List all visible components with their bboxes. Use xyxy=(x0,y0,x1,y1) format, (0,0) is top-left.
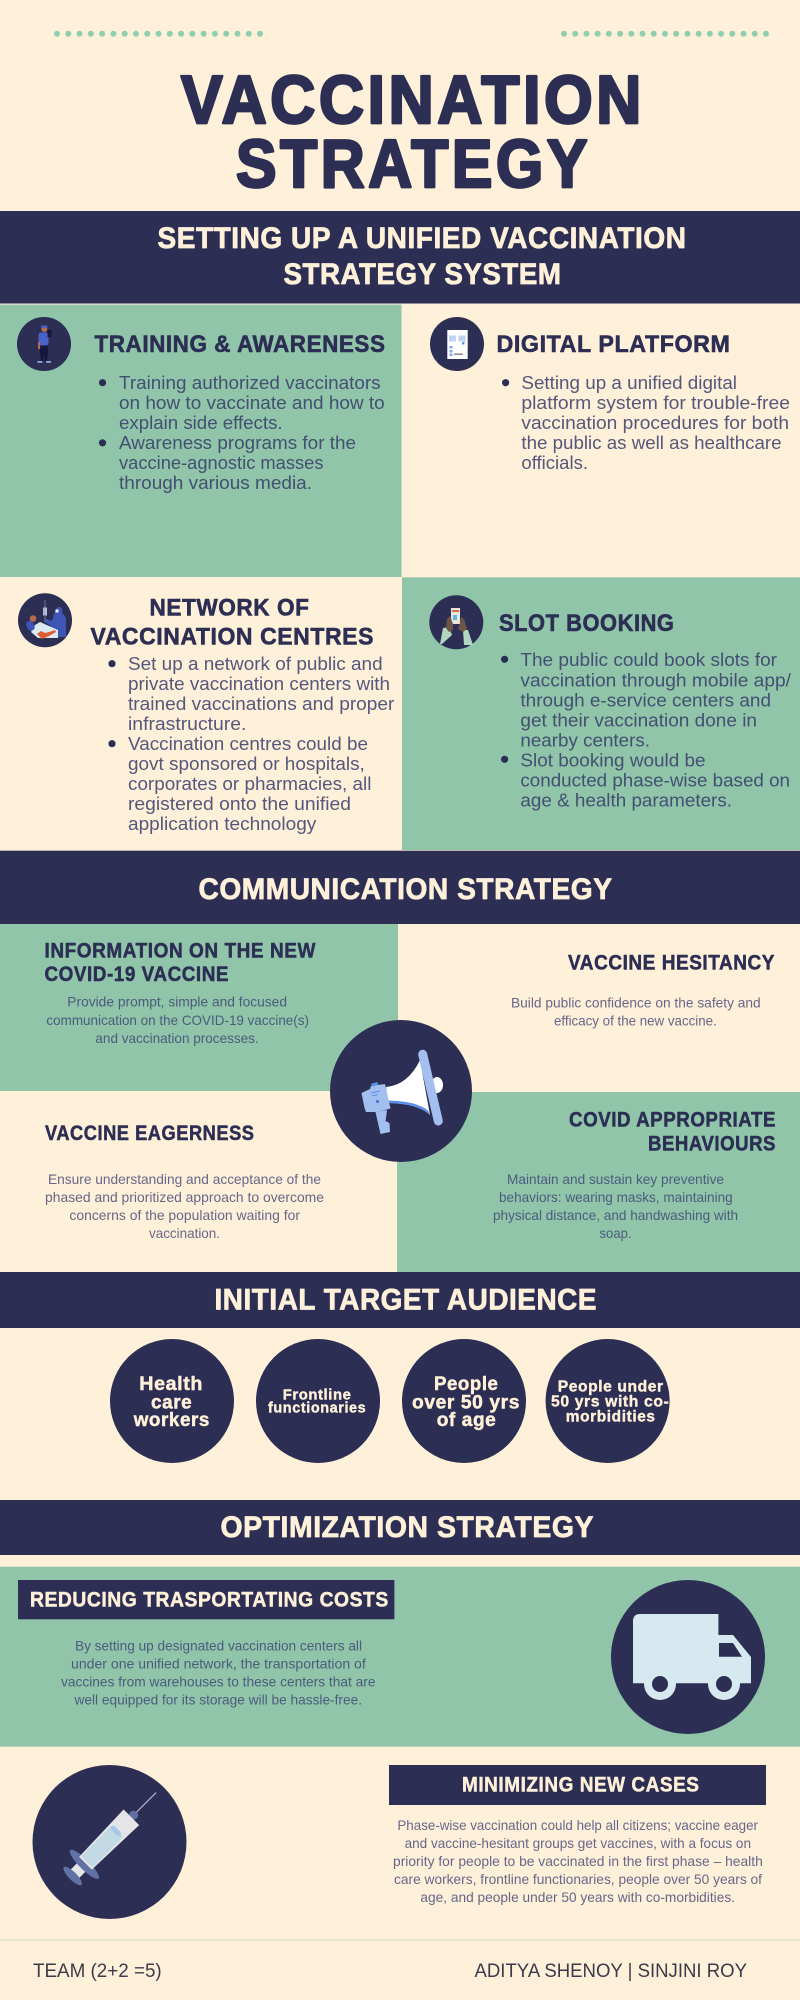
heading: VACCINE EAGERNESS xyxy=(45,1122,254,1145)
heading: DIGITAL PLATFORM xyxy=(496,331,730,358)
icon: person with phone xyxy=(17,317,71,371)
body text xyxy=(46,994,309,1046)
bullet list: trained vaccinations and proper xyxy=(128,693,394,714)
heading: COVID-19 VACCINE xyxy=(44,963,229,986)
bullet list: Training authorized vaccinators xyxy=(119,372,381,393)
bullet list: corporates or pharmacies, all xyxy=(128,773,371,794)
footer: authors: ADITYA SHENOY | SINJINI ROY xyxy=(474,1961,747,1982)
section header: communication strategy xyxy=(0,851,800,924)
body text: Maintain and sustain key preventive xyxy=(507,1171,724,1187)
bullet list: govt sponsored or hospitals, xyxy=(128,753,365,774)
title: STRATEGY xyxy=(236,126,591,202)
label heading xyxy=(18,1580,394,1619)
panel: network of vaccination centres xyxy=(0,577,402,850)
bullet list: on how to vaccinate and how to xyxy=(119,392,385,413)
body text: physical distance, and handwashing with xyxy=(493,1207,738,1223)
body text: age, and people under 50 years with co-morbidities. xyxy=(420,1889,735,1905)
bullet list xyxy=(108,653,394,834)
audience circle: people under 50 years with co-morbidities: morbidities xyxy=(566,1409,656,1426)
audience circle: people over 50 years of age: of age xyxy=(437,1409,496,1431)
bullet list: through various media. xyxy=(119,472,312,493)
section heading text xyxy=(158,222,686,291)
heading: INFORMATION ON THE NEW xyxy=(44,939,316,962)
section header: initial target audience xyxy=(0,1272,800,1328)
audience circle: people under 50 years with co-morbidities: 50 yrs with co- xyxy=(551,1394,669,1411)
section heading text: OPTIMIZATION STRATEGY xyxy=(220,1511,594,1544)
body text: concerns of the population waiting for xyxy=(69,1207,300,1223)
bullet list: age & health parameters. xyxy=(520,790,732,810)
bullet list: The public could book slots for xyxy=(520,649,777,670)
section header: unified vaccination strategy system xyxy=(0,211,800,304)
body text: Build public confidence on the safety and xyxy=(511,995,761,1011)
body text xyxy=(61,1638,376,1708)
dotted decoration: right xyxy=(564,31,768,37)
bullet list: explain side effects. xyxy=(119,412,283,433)
panel: vaccine eagerness xyxy=(0,1091,397,1272)
audience circle: people over 50 years of age: People xyxy=(434,1373,498,1395)
body text: vaccination. xyxy=(149,1225,220,1241)
heading: SLOT BOOKING xyxy=(499,610,674,637)
bullet list: the public as well as healthcare xyxy=(521,432,782,453)
bullet list: platform system for trouble-free xyxy=(521,392,790,413)
title: VACCINATION xyxy=(181,62,645,138)
heading: NETWORK OF xyxy=(150,595,310,622)
bullet list xyxy=(502,372,790,473)
audience circle: health care workers xyxy=(110,1339,234,1463)
bullet list xyxy=(501,649,792,810)
audience circle: frontline functionaries xyxy=(256,1339,380,1463)
body text: behaviors: wearing masks, maintaining xyxy=(499,1189,733,1205)
audience circle: health care workers: workers xyxy=(133,1409,210,1431)
icon: hands holding phone xyxy=(429,595,483,649)
heading: VACCINATION CENTRES xyxy=(90,624,374,651)
audience circle: people over 50 years of age: over 50 yrs xyxy=(412,1391,520,1413)
bullet list: conducted phase-wise based on xyxy=(520,770,790,790)
section heading text: STRATEGY SYSTEM xyxy=(284,258,562,291)
bullet list: Setting up a unified digital xyxy=(521,372,737,393)
icon: syringe xyxy=(32,1765,186,1919)
panel: vaccine hesitancy xyxy=(398,924,800,1092)
heading: COVID APPROPRIATE xyxy=(569,1109,776,1132)
dotted decoration: left xyxy=(57,31,262,37)
icon: digital document screen xyxy=(430,317,484,371)
heading xyxy=(90,595,374,651)
bullet list: vaccine-agnostic masses xyxy=(119,452,324,473)
body text xyxy=(511,995,761,1029)
label heading xyxy=(389,1765,766,1805)
panel: digital platform xyxy=(402,305,800,577)
audience circle: frontline functionaries: Frontline xyxy=(283,1386,352,1403)
panel: covid appropriate behaviours xyxy=(397,1092,800,1272)
bullet list: get their vaccination done in xyxy=(520,710,757,730)
bullet list: application technology xyxy=(128,813,317,834)
body text xyxy=(393,1817,763,1905)
body text: Phase-wise vaccination could help all citizens; vaccine eager xyxy=(397,1817,758,1833)
icon: patient and doctor xyxy=(18,593,72,647)
bullet list: officials. xyxy=(521,452,588,473)
bullet list: Vaccination centres could be xyxy=(128,733,368,754)
heading: VACCINE HESITANCY xyxy=(568,951,775,974)
panel: information on the new covid-19 vaccine xyxy=(0,924,398,1091)
body text xyxy=(45,1171,324,1241)
body text: communication on the COVID-19 vaccine(s) xyxy=(46,1012,309,1028)
body text: under one unified network, the transportation of xyxy=(71,1656,366,1672)
bullet list: Set up a network of public and xyxy=(128,653,383,674)
panel: minimizing new cases xyxy=(389,1765,766,1905)
bullet list: vaccination procedures for both xyxy=(521,412,789,433)
panel: reducing transporting costs xyxy=(0,1567,800,1747)
body text: Provide prompt, simple and focused xyxy=(67,994,287,1010)
body text: By setting up designated vaccination centers all xyxy=(75,1638,362,1654)
label heading: MINIMIZING NEW CASES xyxy=(462,1774,700,1797)
heading: TRAINING & AWARENESS xyxy=(94,331,386,358)
body text: and vaccine-hesitant groups get vaccines, with a focus on xyxy=(405,1835,751,1851)
heading xyxy=(44,939,316,986)
body text: priority for people to be vaccinated in the first phase – health xyxy=(393,1853,763,1869)
body text: soap. xyxy=(600,1225,632,1241)
bullet list: vaccination through mobile app/ xyxy=(520,670,792,690)
body text: vaccines from warehouses to these centers that are xyxy=(61,1674,376,1690)
audience circle: health care workers: care xyxy=(151,1391,192,1413)
section header: optimization strategy xyxy=(0,1500,800,1555)
audience circle: people under 50 years with co-morbidities: People under xyxy=(558,1379,664,1396)
icon: megaphone xyxy=(330,1020,472,1162)
body text: phased and prioritized approach to overcome xyxy=(45,1189,324,1205)
body text: efficacy of the new vaccine. xyxy=(554,1013,717,1029)
title xyxy=(181,62,645,202)
panel: slot booking xyxy=(402,577,800,850)
audience circle: frontline functionaries: functionaries xyxy=(268,1400,366,1417)
bullet list: Awareness programs for the xyxy=(119,432,356,453)
audience circle: people under 50 years with co-morbidities xyxy=(546,1339,670,1463)
panel: training and awareness xyxy=(0,305,402,577)
section heading text: COMMUNICATION STRATEGY xyxy=(198,873,612,906)
bullet list: through e-service centers and xyxy=(520,690,771,710)
section heading text: INITIAL TARGET AUDIENCE xyxy=(214,1283,597,1316)
body text xyxy=(493,1171,738,1241)
bullet list: infrastructure. xyxy=(128,713,246,734)
footer: team name: TEAM (2+2 =5) xyxy=(33,1961,162,1982)
heading xyxy=(569,1109,776,1156)
bullet list: nearby centers. xyxy=(520,730,650,750)
audience circle: health care workers: Health xyxy=(139,1373,203,1395)
bullet list: registered onto the unified xyxy=(128,793,351,814)
body text: Ensure understanding and acceptance of the xyxy=(48,1171,321,1187)
body text: well equipped for its storage will be hassle-free. xyxy=(74,1692,362,1708)
heading: BEHAVIOURS xyxy=(648,1133,776,1156)
bullet list: private vaccination centers with xyxy=(128,673,390,694)
icon: delivery truck xyxy=(611,1580,765,1734)
audience circle: people over 50 years of age xyxy=(402,1339,526,1463)
bullet list: Slot booking would be xyxy=(520,750,706,770)
label heading: REDUCING TRASPORTATING COSTS xyxy=(30,1589,389,1612)
body text: and vaccination processes. xyxy=(95,1030,259,1046)
body text: care workers, frontline functionaries, people over 50 years of xyxy=(394,1871,762,1887)
bullet list xyxy=(99,372,385,493)
section heading text: SETTING UP A UNIFIED VACCINATION xyxy=(158,222,686,255)
